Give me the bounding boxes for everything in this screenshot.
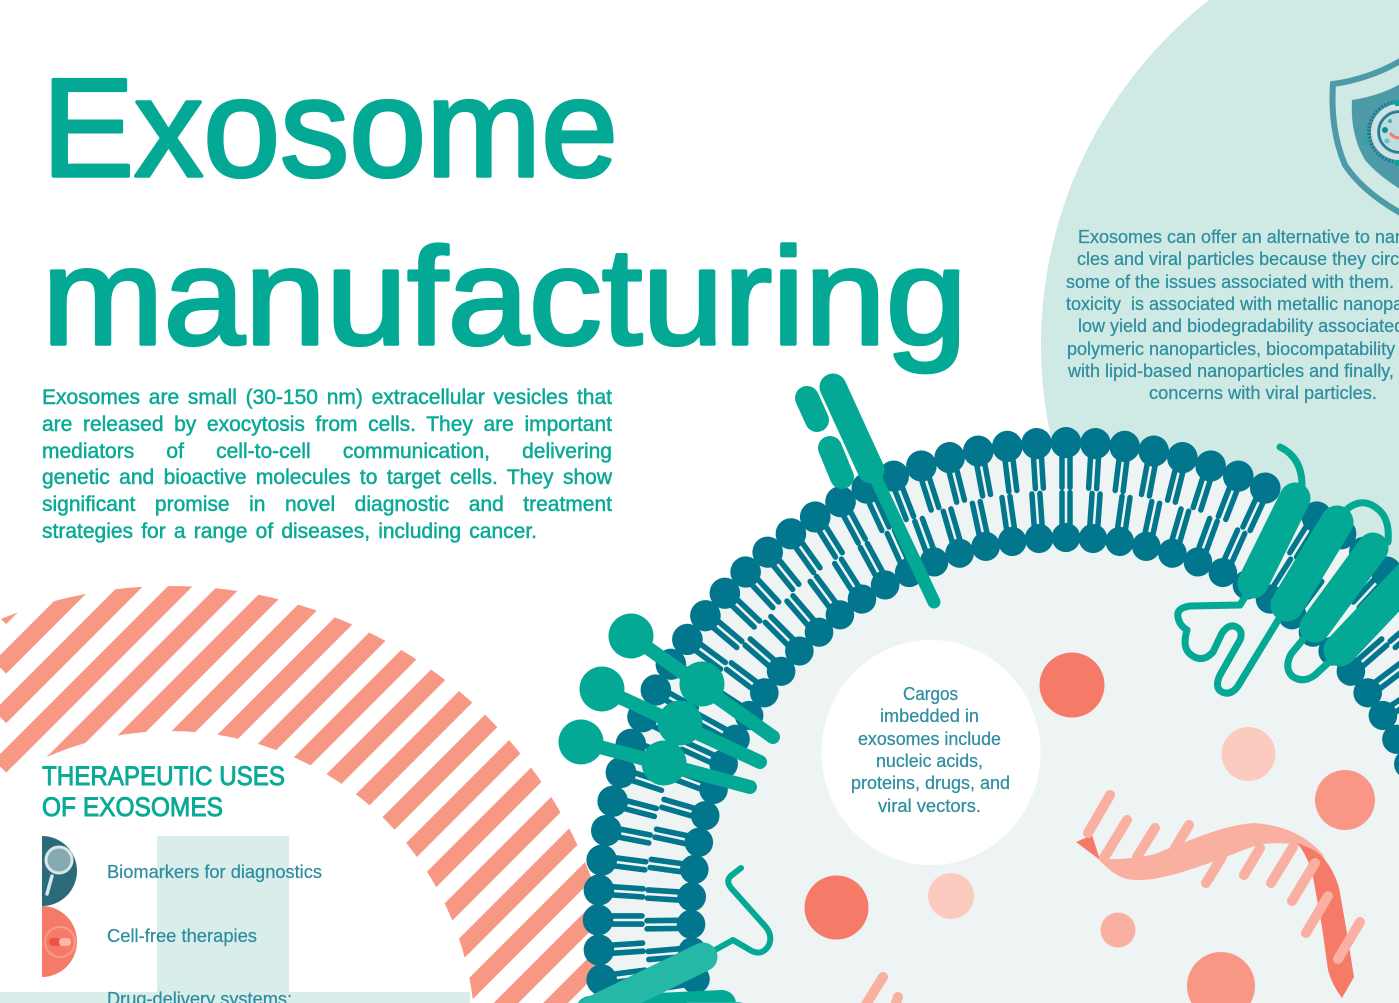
title: Exosome	[42, 49, 618, 206]
protein: right transmembrane with loops	[1178, 447, 1399, 693]
background circle: top right	[1041, 0, 1399, 783]
intro paragraph: significant promise in novel diagnostic and treatment	[42, 493, 612, 516]
intro paragraph: are released by exocytosis from cells. They are important	[42, 413, 612, 436]
text block: alternative to nanoparticles	[1066, 227, 1399, 403]
protein: top-left receptor rods	[807, 387, 934, 602]
text block: alternative to nanoparticles: concerns with viral particles.	[1149, 383, 1377, 403]
callout: cargos	[822, 640, 1040, 865]
heading: therapeutic uses: THERAPEUTIC USES	[42, 761, 285, 791]
list: therapeutic uses	[107, 862, 322, 1003]
protein: lollipop lipids on the left	[558, 614, 773, 787]
cargo particles	[804, 652, 1375, 1003]
list: therapeutic uses: Cell-free therapies	[107, 926, 257, 946]
title	[42, 49, 967, 374]
bottom RNA fragment	[865, 977, 898, 1003]
protein: bottom-left transmembrane	[590, 868, 770, 1003]
RNA strand	[1076, 795, 1360, 998]
striped ring	[0, 586, 596, 1003]
intro paragraph: mediators of cell-to-cell communication, delivering	[42, 440, 612, 462]
intro paragraph: genetic and bioactive molecules to target cells. They show	[42, 466, 612, 489]
heading: therapeutic uses	[42, 761, 285, 822]
intro paragraph: strategies for a range of diseases, including cancer.	[42, 520, 537, 543]
membrane bilayer	[583, 427, 1399, 1003]
icon: magnifier half circle	[42, 836, 77, 906]
list: therapeutic uses: Biomarkers for diagnostics	[107, 862, 322, 882]
pale backing panels behind the list	[0, 836, 470, 1003]
callout: cargos: proteins, drugs, and	[851, 773, 1010, 793]
icon: shield with exosome	[1332, 55, 1399, 218]
callout: cargos: exosomes include	[858, 729, 1001, 749]
callout: cargos: Cargos	[903, 684, 958, 704]
callout: cargos: nucleic acids,	[876, 751, 983, 771]
intro paragraph: Exosomes are small (30-150 nm) extracellular vesicles that	[42, 386, 612, 409]
callout: cargos: viral vectors.	[878, 796, 981, 816]
icon: pill half circle	[42, 906, 77, 977]
title: manufacturing	[42, 220, 967, 374]
intro paragraph	[42, 386, 612, 543]
exosome interior	[598, 442, 1399, 1003]
callout: cargos: imbedded in	[880, 706, 979, 726]
heading: therapeutic uses: OF EXOSOMES	[42, 792, 223, 822]
